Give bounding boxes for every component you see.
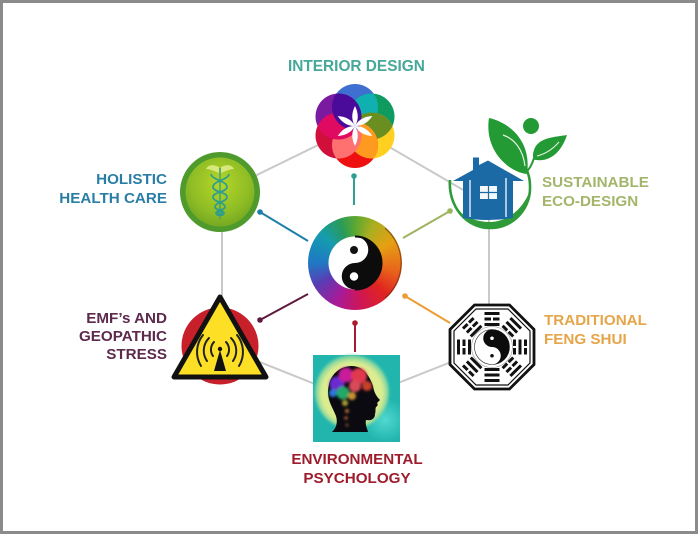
- icon: yin-yang on rainbow ring: [308, 216, 402, 310]
- spoke: environmental psychology: [352, 320, 358, 352]
- heading: environmental psychology: PSYCHOLOGY: [303, 470, 411, 486]
- heading: environmental psychology: [291, 451, 423, 486]
- heading: traditional feng shui: [544, 312, 647, 348]
- heading: environmental psychology: ENVIRONMENTAL: [291, 451, 423, 468]
- heading: sustainable eco-design: [542, 174, 649, 210]
- heading: traditional feng shui: FENG SHUI: [544, 330, 627, 348]
- heading: holistic health care: HEALTH CARE: [59, 190, 167, 206]
- spoke: holistic health care: [257, 209, 308, 241]
- heading: sustainable eco-design: ECO-DESIGN: [542, 192, 638, 210]
- heading: EMF's and geopathic stress: GEOPATHIC: [79, 328, 167, 345]
- spoke: traditional feng shui: [402, 293, 450, 323]
- heading: traditional feng shui: TRADITIONAL: [544, 312, 647, 329]
- spoke: EMF and geopathic stress: [257, 294, 308, 323]
- heading: EMF's and geopathic stress: [79, 310, 167, 363]
- icon: color flower: [316, 84, 394, 168]
- heading: EMF's and geopathic stress: EMF’s AND: [86, 310, 167, 327]
- heading: sustainable eco-design: SUSTAINABLE: [542, 174, 649, 191]
- heading: holistic health care: HOLISTIC: [96, 171, 167, 188]
- heading: EMF's and geopathic stress: STRESS: [106, 346, 167, 363]
- heading: interior design: INTERIOR DESIGN: [288, 58, 425, 75]
- heading: holistic health care: [59, 171, 167, 206]
- spoke: interior design: [351, 173, 357, 205]
- spoke: sustainable eco-design: [403, 208, 453, 238]
